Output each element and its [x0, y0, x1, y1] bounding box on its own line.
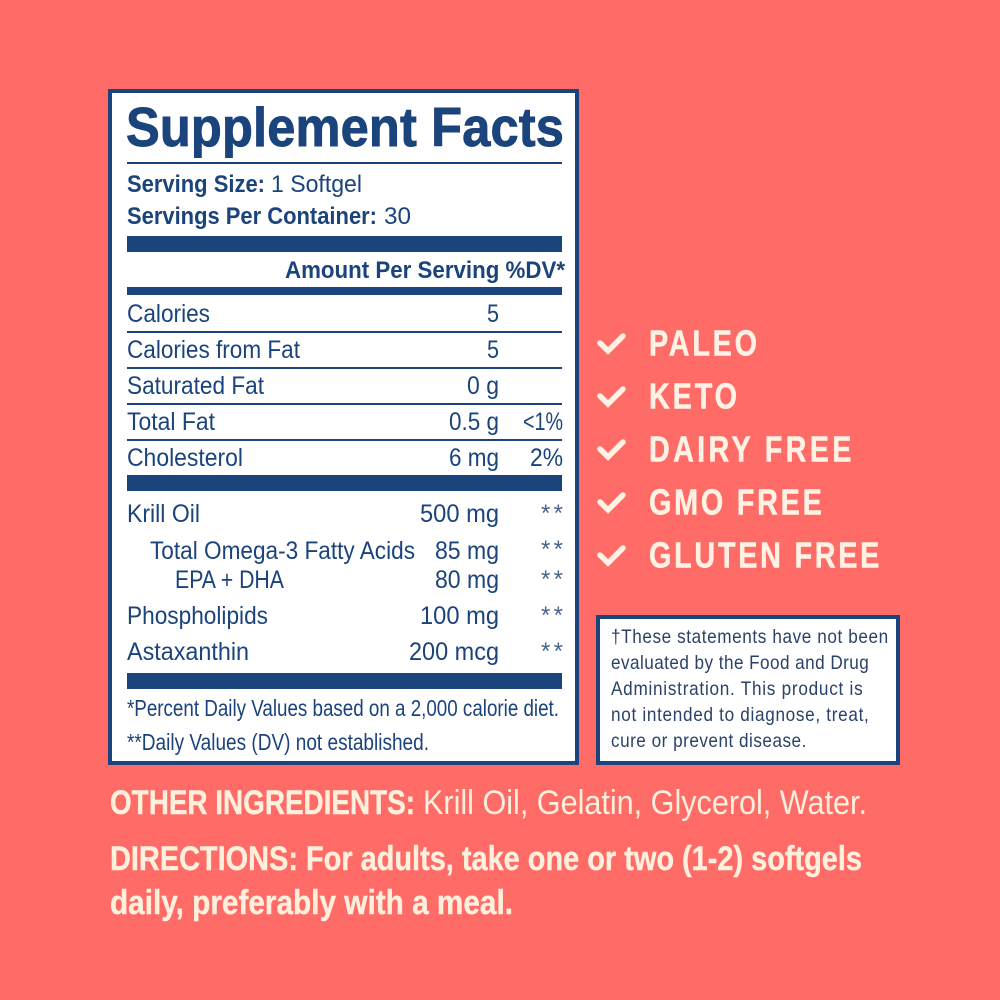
text block: other ingredients and directions: Krill Oil, Gelatin, Glycerol, Water.	[423, 784, 867, 822]
column header: Amount Per Serving %DV*	[285, 257, 566, 284]
nutrient rows: 0.5 g	[449, 408, 499, 436]
serving info: Servings Per Container:	[127, 203, 377, 230]
claim: dairy free: DAIRY FREE	[649, 428, 851, 469]
ingredient rows: **	[541, 602, 563, 629]
claim: gmo free: GMO FREE	[649, 481, 822, 522]
nutrient rows: Calories from Fat	[127, 336, 300, 364]
claim: gluten free: GLUTEN FREE	[649, 534, 879, 575]
claim: keto: KETO	[649, 375, 737, 416]
ingredient rows: 85 mg	[435, 537, 499, 565]
ingredient rows: **	[541, 536, 563, 563]
ingredient rows: Phospholipids	[127, 602, 268, 630]
heading: Supplement Facts: Supplement Facts	[126, 97, 564, 158]
ingredient rows: EPA + DHA	[175, 566, 284, 594]
icon: check	[600, 442, 623, 457]
ingredient rows	[127, 500, 563, 666]
ingredient rows: 100 mg	[420, 602, 499, 630]
ingredient rows: **	[541, 566, 563, 593]
icon: check	[600, 336, 623, 351]
footnotes: **Daily Values (DV) not established.	[127, 729, 429, 755]
serving info: Serving Size:	[127, 171, 265, 198]
text block: other ingredients and directions	[110, 784, 867, 922]
nutrient rows: <1%	[523, 408, 563, 436]
nutrient rows: 5	[487, 300, 499, 328]
callout: FDA disclaimer	[598, 617, 898, 763]
serving info: 1 Softgel	[271, 171, 362, 198]
ingredient rows: Astaxanthin	[127, 638, 249, 666]
ingredient rows: 500 mg	[420, 500, 499, 528]
footnotes	[127, 695, 559, 755]
nutrient rows: 5	[487, 336, 499, 364]
ingredient rows: **	[541, 500, 563, 527]
callout: FDA disclaimer: cure or prevent disease.	[611, 729, 806, 751]
ingredient rows: **	[541, 638, 563, 665]
serving info	[127, 171, 411, 230]
nutrient rows: Saturated Fat	[127, 372, 264, 400]
icon: check	[600, 389, 623, 404]
text block: other ingredients and directions: DIRECTIONS: For adults, take one or two (1-2) softgels	[110, 840, 862, 878]
icon: check	[600, 548, 623, 563]
callout: FDA disclaimer: evaluated by the Food and Drug	[611, 651, 869, 673]
nutrient rows: Cholesterol	[127, 444, 243, 472]
claim: paleo: PALEO	[649, 322, 757, 363]
ingredient rows: 80 mg	[435, 566, 499, 594]
text block: other ingredients and directions: OTHER INGREDIENTS:	[110, 784, 415, 822]
callout: FDA disclaimer: Administration. This product is	[611, 677, 863, 699]
text block: other ingredients and directions: daily, preferably with a meal.	[110, 884, 513, 922]
callout: FDA disclaimer: †These statements have not been	[611, 625, 888, 647]
nutrient rows: 6 mg	[449, 444, 499, 472]
list: diet claims	[600, 322, 879, 575]
ingredient rows: Krill Oil	[127, 500, 200, 528]
nutrient rows: 0 g	[467, 372, 499, 400]
icon: check	[600, 495, 623, 510]
footnotes: *Percent Daily Values based on a 2,000 calorie diet.	[127, 695, 559, 721]
ingredient rows: Total Omega-3 Fatty Acids	[150, 537, 415, 565]
callout: FDA disclaimer: not intended to diagnose, treat,	[611, 703, 869, 725]
ingredient rows: 200 mcg	[409, 638, 499, 666]
nutrient rows	[127, 300, 563, 472]
panel: supplement facts label	[110, 91, 577, 763]
nutrient rows: 2%	[530, 444, 563, 472]
serving info: 30	[384, 203, 411, 230]
nutrient rows: Calories	[127, 300, 210, 328]
nutrient rows: Total Fat	[127, 408, 215, 436]
